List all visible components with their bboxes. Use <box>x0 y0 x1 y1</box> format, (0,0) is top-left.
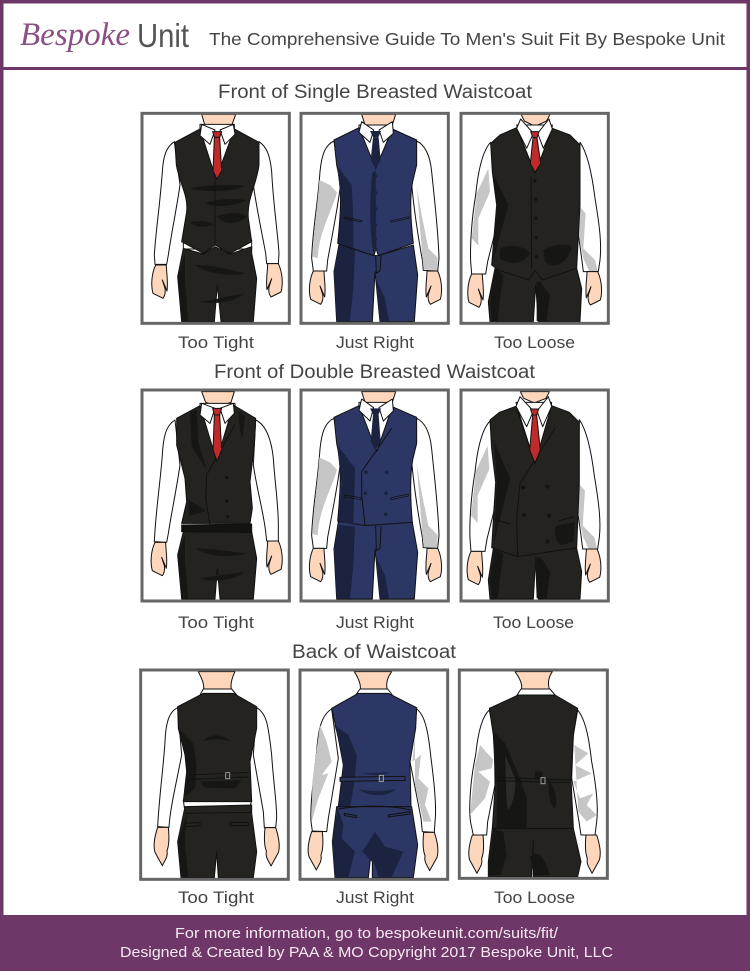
panel: back just right <box>300 670 448 879</box>
panel: back too loose <box>459 670 607 878</box>
label: just right 1: Just Right <box>336 333 414 352</box>
panel: double breasted just right <box>301 390 448 601</box>
footer: For more information, go to bespokeunit.com/suits/fit/ <box>175 926 559 942</box>
heading: double breasted: Front of Double Breasted Waistcoat <box>214 362 536 383</box>
panel: double breasted too tight <box>142 390 289 601</box>
header <box>20 17 725 54</box>
heading: back of waistcoat: Back of Waistcoat <box>292 642 457 663</box>
panel: single breasted too tight <box>142 113 289 323</box>
panel: single breasted just right <box>301 113 448 323</box>
label: too loose 3: Too Loose <box>494 888 575 907</box>
label: too loose 1: Too Loose <box>494 333 575 352</box>
logo: Bespoke Unit: Bespoke <box>20 17 130 53</box>
panel: back too tight <box>141 670 288 879</box>
logo: Bespoke Unit <box>20 17 189 54</box>
panel: single breasted too loose <box>461 113 608 323</box>
panel: double breasted too loose <box>461 390 608 601</box>
label: too tight 2: Too Tight <box>178 613 254 632</box>
label: too loose 2: Too Loose <box>493 613 574 632</box>
label: just right 3: Just Right <box>336 888 414 907</box>
logo: Bespoke Unit: Unit <box>137 17 189 54</box>
footer <box>120 926 613 961</box>
footer: Designed & Created by PAA & MO Copyright 2017 Bespoke Unit, LLC <box>120 945 613 961</box>
label: just right 2: Just Right <box>336 613 414 632</box>
label: too tight 1: Too Tight <box>178 333 254 352</box>
heading: single breasted: Front of Single Breasted Waistcoat <box>218 82 533 103</box>
title: The Comprehensive Guide To Men's Suit Fit By Bespoke Unit <box>209 29 725 49</box>
label: too tight 3: Too Tight <box>178 888 254 907</box>
